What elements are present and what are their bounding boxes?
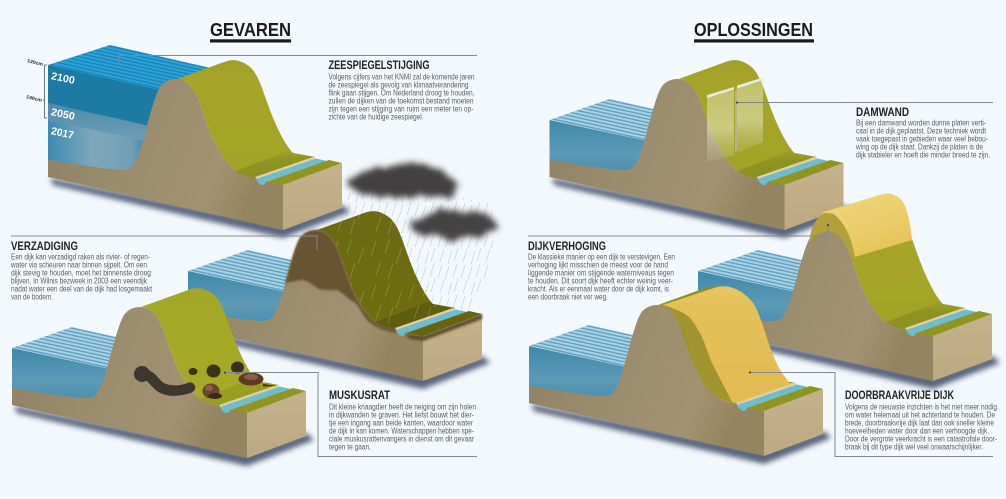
illustration: raised dike (698, 193, 1000, 389)
illustration: breach-free dike (529, 286, 831, 464)
callout line: damwand (736, 102, 993, 104)
illustration: dike with sea level rise (26, 45, 350, 238)
rain streaks on grass (317, 211, 455, 330)
year labels: 2100 (50, 70, 76, 87)
year labels: 2050 (50, 106, 76, 123)
text: muskusrat (329, 390, 476, 452)
text: verzadiging: van de bodem. (11, 292, 53, 302)
scale bracket (26, 58, 47, 118)
text: verzadiging: Een dijk kan verzadigd raken als rivier- of regen- (11, 252, 150, 262)
water layer 2050 (48, 103, 150, 142)
year labels: 2017 (50, 125, 75, 142)
text: muskusrat: Dit kleine knaagdier heeft de neiging om zijn holen (329, 402, 476, 412)
text: verzadiging: water via scheuren naar binnen sijpelt. Om een (10, 260, 147, 270)
year labels (50, 70, 76, 142)
text: zeespiegelstijging: zijn tegen een stijging van ruim een meter ten op- (328, 104, 474, 114)
muskrat burrows (134, 362, 244, 391)
yellow raised cap (820, 193, 912, 257)
scale bracket: 120cm (27, 58, 43, 67)
text: muskusrat: tje een ingang aan beide kanten, waardoor water (329, 418, 473, 428)
text: damwand: DAMWAND (856, 107, 909, 119)
text: zeespiegelstijging (328, 60, 474, 122)
heading: gevaren: GEVAREN (210, 20, 291, 40)
sheet pile panels (707, 78, 763, 162)
text: zeespiegelstijging: ZEESPIEGELSTIJGING (328, 60, 430, 72)
text: doorbraakvrije dijk: DOORBRAAKVRIJE DIJK (845, 390, 955, 402)
text: muskusrat: de dijk in kan komen. Waterschappen hebben spe- (329, 426, 474, 436)
water layer 2017 (48, 120, 146, 174)
text: damwand (855, 107, 990, 160)
text: muskusrat: MUSKUSRAT (329, 390, 390, 402)
scale bracket: 140cm (26, 94, 42, 103)
yellow widened layer (663, 286, 796, 404)
text: dijkverhoging: verhoging lijkt misschien de meest voor de hand (528, 260, 668, 270)
callout line: verzadiging (11, 236, 317, 250)
text: verzadiging: dijk stevig te houden, moet het binnenste droog (11, 268, 151, 278)
rain (340, 192, 494, 318)
text: zeespiegelstijging: de zeespiegel als gevolg van klimaatverandering (328, 80, 468, 90)
text: verzadiging: blijven. In Wilnis bezweek in 2003 een veendijk (11, 276, 148, 286)
text: zeespiegelstijging: zullen de dijken van de toekomst bestand moeten (328, 96, 474, 106)
illustration: saturated dike (188, 211, 490, 389)
text: doorbraakvrije dijk (845, 390, 997, 452)
water layer 2100 (48, 65, 160, 128)
text: dijkverhoging: te houden. Dit soort dijk heeft echter weinig veer- (528, 276, 673, 286)
text: dijkverhoging: kracht. Als er eenmaal water door de dijk komt, is (528, 284, 669, 294)
text: dijkverhoging: een doorbraak niet ver weg. (528, 292, 608, 302)
text: zeespiegelstijging: flink gaan stijgen. Om Nederland droog te houden, (328, 88, 474, 98)
callout line: muskusrat (225, 372, 477, 456)
text: zeespiegelstijging: zichte van de huidige zeespiegel. (328, 112, 424, 122)
clouds (348, 164, 499, 239)
raised cap side (810, 213, 862, 285)
illustration: sheet pile dike (550, 60, 852, 238)
text: muskusrat: in dijkwanden te graven. Het liefst bouwt het dier- (329, 410, 474, 420)
icon: muskrat (202, 384, 222, 399)
illustration: muskrat dike (12, 288, 314, 466)
soaked earth (285, 230, 397, 333)
text: dijkverhoging: De klassieke manier op een dijk te verstevigen. Een (528, 252, 675, 262)
callout line: doorbraakvrije dijk (750, 372, 993, 456)
text: dijkverhoging: liggende manier om stijgende waterniveaus tegen (528, 268, 674, 278)
water top surface (48, 45, 215, 92)
text: zeespiegelstijging: Volgens cijfers van het KNMI zal de komende jaren (328, 72, 474, 82)
callout line: dijkverhoging (528, 225, 828, 236)
text: muskusrat: ciale muskusrattenvangers in dienst om dit gevaar (329, 434, 474, 444)
text: verzadiging: nadat water een deel van de dijk had losgemaakt (11, 284, 153, 294)
text: dijkverhoging: DIJKVERHOGING (528, 241, 606, 253)
heading: oplossingen: OPLOSSINGEN (694, 20, 813, 40)
icon: muskrat (238, 372, 277, 386)
text: verzadiging (10, 241, 153, 302)
text: verzadiging: VERZADIGING (11, 241, 78, 253)
olive side of widened layer (658, 300, 745, 403)
callout line: zeespiegelstijging (119, 56, 477, 64)
text: muskusrat: tegen te gaan. (329, 442, 371, 452)
text: dijkverhoging (528, 241, 675, 302)
